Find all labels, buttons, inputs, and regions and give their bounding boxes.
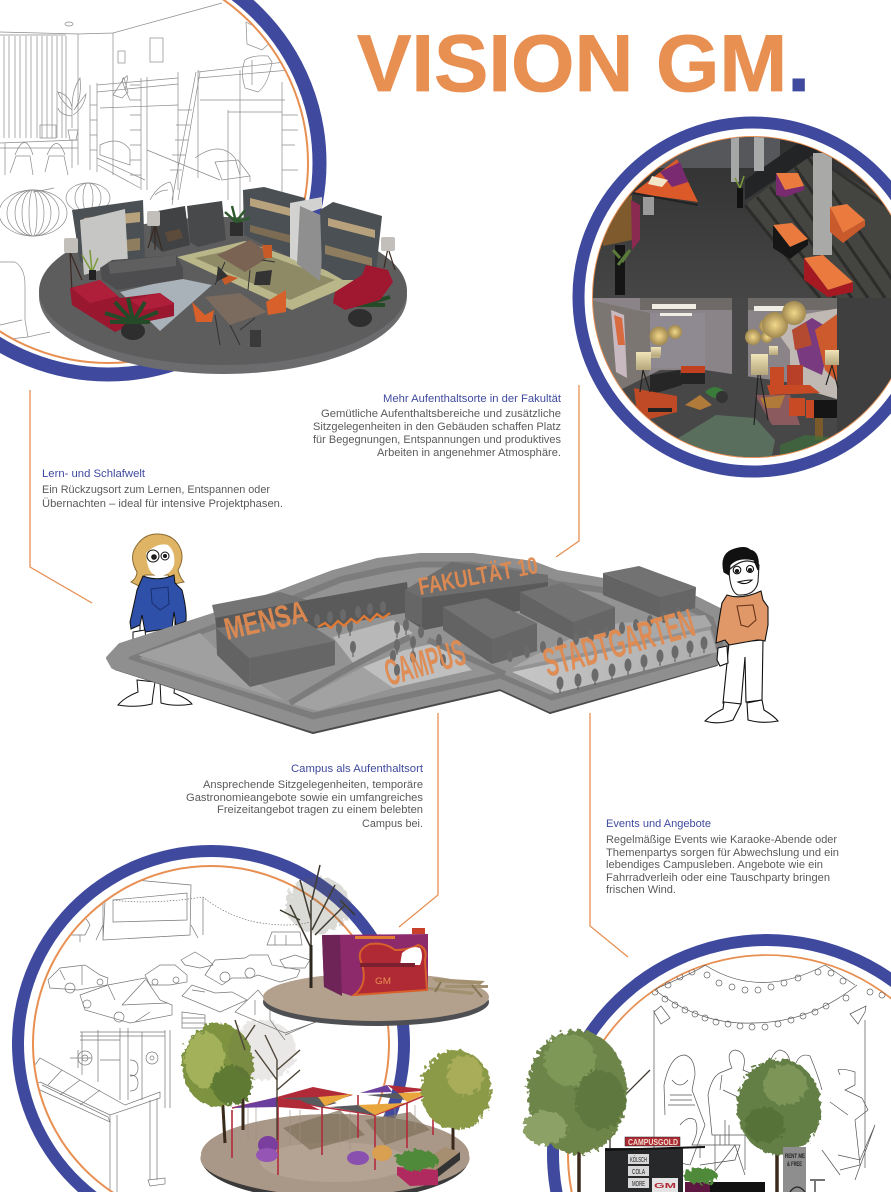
panel: learning and sleeping world circle: [0, 0, 407, 374]
character: girl in blue sweater (partly behind the model): [118, 534, 192, 706]
building: block 3: [520, 583, 615, 640]
text block: Mehr Aufenthaltsorte: Arbeiten in angenehmer Atmosphäre.: [377, 447, 561, 459]
sweater: [130, 575, 186, 632]
bare trees middle: [228, 1020, 300, 1140]
kiosk: [322, 928, 428, 996]
text block: Events und Angebote: Regelmäßige Events wie Karaoke-Abende oder: [606, 834, 837, 846]
label STADTGARTEN: STADTGARTEN: [538, 601, 700, 686]
tables and chairs: [192, 240, 286, 347]
text block: Campus als Aufenthaltsort: Campus als Aufenthaltsort: [291, 763, 423, 775]
blue ring: [578, 122, 891, 472]
bare trees behind kiosk: [280, 865, 355, 988]
line sketch of the dormitory room: [0, 3, 298, 340]
rental sign: RENT ME: [785, 1153, 805, 1160]
leader line: sleep world: [30, 390, 92, 603]
render of the staircase area: [590, 135, 891, 298]
building: block 4: [603, 566, 696, 618]
mouth: [738, 580, 752, 584]
blue ring: [547, 934, 891, 1192]
armchairs: [150, 201, 226, 252]
text block: Lern- und Schlafwelt: [42, 468, 283, 510]
floor disc: [39, 217, 407, 374]
bunk bed left: [72, 200, 145, 275]
red armchair: [333, 265, 393, 310]
leader line: events: [590, 713, 628, 957]
building: faculty: [405, 562, 548, 630]
hands: [133, 630, 146, 642]
inner ground: [142, 569, 715, 711]
text block: Campus als Aufenthaltsort: Campus bei.: [362, 818, 423, 830]
campus map model: [108, 552, 735, 733]
red sofa: [70, 280, 174, 332]
rugs: [120, 241, 358, 331]
picnic bench: [428, 978, 488, 997]
character: man in orange sweater: [705, 548, 778, 723]
bean bags: [256, 1136, 392, 1165]
sweater logo: [737, 605, 756, 627]
text block: Events und Angebote: Themenpartys sorgen für Abwechslung und ein: [606, 847, 839, 859]
orange ring: [567, 954, 891, 1192]
text block: Events und Angebote: [606, 818, 839, 896]
hand: [717, 646, 728, 666]
hair: [723, 548, 758, 575]
line sketch: open-air cinema and outdoor gym: [35, 880, 322, 1192]
floor lamps: [64, 211, 395, 292]
kiosk platform: [263, 973, 489, 1026]
shoes and cuffs: [118, 680, 192, 706]
line sketch: party crowd and string lights: [652, 965, 885, 1180]
building: mensa block: [216, 618, 335, 687]
text block: Events und Angebote: frischen Wind.: [606, 884, 676, 896]
menu board: Kölsch: KÖLSCH: [630, 1156, 647, 1164]
kiosk: GM: [375, 976, 391, 986]
shoes: [705, 700, 778, 723]
bunk bed right: [320, 202, 382, 280]
bicycle: [790, 1180, 825, 1192]
text block: Lern- und Schlafwelt: Ein Rückzugsort zum Lernen, Entspannen oder: [42, 484, 270, 496]
platform base: [110, 620, 730, 733]
platform top: [108, 555, 735, 730]
building: block 2: [443, 598, 537, 664]
orange ring: [32, 865, 390, 1192]
planter and bench: [682, 1168, 765, 1192]
tree right: [737, 1059, 821, 1192]
text block: Mehr Aufenthaltsorte: Gemütliche Aufenthaltsbereiche und zusätzliche: [321, 408, 561, 420]
trousers: [723, 640, 763, 704]
leader line: campus: [399, 713, 438, 927]
kiosk poster: GM: [654, 1183, 676, 1190]
menu board: Cola: COLA: [632, 1169, 645, 1176]
text block: Events und Angebote: Events und Angebote: [606, 818, 711, 830]
potted plants: [82, 206, 390, 340]
text block: Mehr Aufenthaltsorte: für Begegnungen, Entspannungen und produktives: [313, 434, 561, 446]
label MENSA: MENSA: [221, 594, 310, 647]
orange ring: [593, 137, 891, 457]
text block: Lern- und Schlafwelt: Übernachten – ideal für intensive Projektphasen.: [42, 498, 283, 510]
blue ring: [0, 0, 320, 374]
sweater logo: [151, 587, 169, 610]
road groove: [130, 563, 722, 718]
face: [146, 544, 174, 576]
orange ring: [0, 0, 308, 363]
trees on the model: [314, 601, 708, 693]
panel: faculty lounge circle: [578, 122, 891, 472]
label FAKULTÄT 10: FAKULTÄT 10: [416, 552, 540, 601]
render of the lounge: [590, 298, 891, 470]
shade structure: [232, 1085, 433, 1175]
text block: Mehr Aufenthaltsorte: Mehr Aufenthaltsorte in der Fakultät: [383, 393, 561, 405]
sweater: [716, 591, 768, 645]
planter and bench: [396, 1147, 460, 1186]
campusgold kiosk: [605, 1137, 705, 1192]
text block: Lern- und Schlafwelt: Lern- und Schlafwelt: [42, 468, 145, 480]
grey sofa: [100, 255, 183, 290]
rental sign: [783, 1147, 806, 1192]
label CAMPUS: CAMPUS: [380, 632, 470, 694]
kiosk sign: CAMPUSGOLD: [628, 1138, 678, 1147]
panel: campus circle: [12, 845, 491, 1192]
text block: Events und Angebote: Fahrradverleih oder eine Tauschparty bringen: [606, 872, 830, 884]
text block: Mehr Aufenthaltsorte: Sitzgelegenheiten in den Gebäuden schaffen Platz: [313, 421, 561, 433]
hair: [131, 534, 184, 587]
title: VISION GM.: [357, 19, 810, 109]
rental sign: & FREE: [787, 1161, 802, 1168]
eyes: [733, 566, 754, 574]
menu board: More: MORE: [632, 1181, 645, 1188]
blue ring: [12, 845, 410, 1192]
tree left: [523, 1030, 650, 1192]
text block: Campus als Aufenthaltsort: Gastronomieangebote sowie ein umfangreiches: [186, 792, 423, 804]
text block: Events und Angebote: lebendiges Campusleben. Angebote wie ein: [606, 859, 823, 871]
text block: Campus als Aufenthaltsort: Ansprechende Sitzgelegenheiten, temporäre: [203, 779, 423, 791]
text block: Campus als Aufenthaltsort: Freizeitangebot tragen zu einem belebten: [217, 804, 423, 816]
leader line: lounge: [556, 385, 579, 557]
orange zigzag path: [318, 613, 390, 628]
room divider curtains: [290, 197, 325, 281]
bunk bed centre: [243, 187, 305, 256]
face: [729, 561, 759, 595]
trousers: [140, 615, 175, 645]
eyes: [147, 550, 169, 562]
panel: events circle: [523, 934, 891, 1192]
building: mensa wing: [212, 582, 410, 640]
text block: Campus als Aufenthaltsort: [186, 763, 423, 830]
tree right: [421, 1050, 491, 1150]
tree left: [182, 1023, 254, 1143]
text block: Mehr Aufenthaltsorte: [313, 393, 561, 459]
lawns and paths: [138, 615, 717, 711]
canopy platform: [200, 1114, 470, 1192]
